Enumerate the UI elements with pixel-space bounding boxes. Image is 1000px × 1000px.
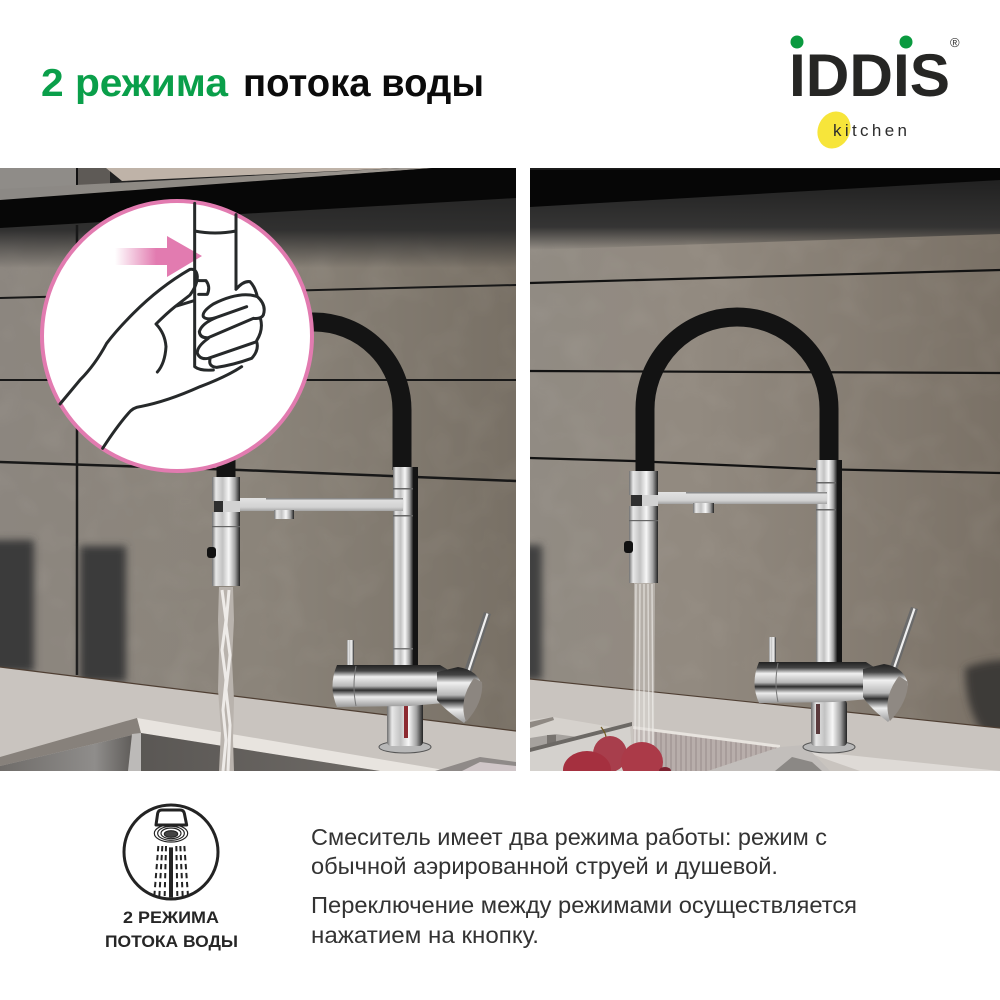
front corner sink bbox=[775, 747, 822, 771]
yellow spot bbox=[811, 106, 857, 154]
faucet arm bbox=[656, 492, 827, 513]
faucet right lever bbox=[890, 607, 918, 668]
spray head bbox=[624, 471, 658, 583]
countertop bbox=[530, 679, 1000, 771]
faucet left lever bbox=[769, 637, 776, 662]
title: потока воды bbox=[243, 62, 484, 105]
faucet arm bbox=[238, 498, 403, 519]
spray head bbox=[207, 477, 240, 586]
faucet body bbox=[754, 662, 908, 722]
description text: Переключение между режимами осуществляется bbox=[311, 892, 857, 918]
aerator housing bbox=[156, 810, 187, 825]
icon ring bbox=[124, 805, 218, 899]
countertop bbox=[0, 667, 516, 771]
aerator mesh bbox=[154, 825, 188, 842]
arrow: press direction bbox=[115, 236, 202, 277]
logo dots bbox=[790, 36, 912, 48]
counter front edge bbox=[812, 752, 998, 771]
wall bbox=[0, 230, 516, 730]
button bbox=[199, 281, 209, 294]
tile seams bbox=[0, 225, 516, 675]
fingers bbox=[197, 282, 264, 367]
callout circle bbox=[42, 201, 312, 471]
shelf bbox=[530, 168, 1000, 207]
shelf bbox=[0, 168, 516, 228]
photo: left, aerated stream bbox=[0, 168, 516, 771]
faucet body bbox=[332, 665, 482, 723]
sink rim bbox=[530, 725, 633, 771]
small basin bbox=[530, 717, 612, 750]
faucet riser bbox=[393, 467, 418, 672]
water stream, shower bbox=[633, 583, 655, 745]
central stream bbox=[165, 847, 177, 897]
second sink corner bbox=[435, 757, 516, 771]
title bbox=[41, 62, 484, 105]
icon caption: ПОТОКА ВОДЫ bbox=[105, 932, 238, 951]
registered mark: ® bbox=[950, 35, 960, 50]
left sink bbox=[0, 718, 450, 771]
tile seams bbox=[530, 270, 1000, 473]
icon caption: 2 РЕЖИМА bbox=[123, 908, 219, 927]
faucet riser bbox=[816, 460, 842, 670]
faucet left lever bbox=[347, 640, 354, 665]
logo wordmark: IDDIS bbox=[789, 42, 950, 109]
spray head outline bbox=[195, 203, 236, 370]
icon caption bbox=[105, 908, 238, 951]
photo: right, shower stream bbox=[522, 168, 1000, 789]
hose bbox=[645, 317, 829, 476]
description text: нажатием на кнопку. bbox=[311, 922, 539, 948]
hand and spray head drawing bbox=[60, 203, 264, 448]
title: 2 режима bbox=[41, 62, 228, 105]
faucet right lever bbox=[465, 612, 491, 672]
kitchen label: kitchen bbox=[833, 121, 907, 140]
upper cabinet and wood board bbox=[0, 168, 398, 189]
wrist bbox=[103, 367, 242, 448]
wall bbox=[530, 227, 1000, 726]
thumb and palm bbox=[60, 269, 197, 404]
callout: button press illustration bbox=[42, 201, 312, 471]
description text: обычной аэрированной струей и душевой. bbox=[311, 853, 778, 879]
logo: IDDIS kitchen bbox=[789, 35, 960, 154]
faucet base bbox=[379, 700, 431, 753]
water stream, aerated bbox=[218, 587, 234, 771]
hose bbox=[226, 322, 402, 482]
object shadows bbox=[522, 545, 1000, 735]
apples bbox=[563, 726, 671, 771]
shower droplets bbox=[154, 846, 188, 896]
description text bbox=[311, 824, 857, 948]
icon: two water-flow modes bbox=[124, 805, 218, 899]
faucet base bbox=[803, 700, 855, 753]
main basin brushed wall bbox=[633, 727, 780, 771]
description text: Смеситель имеет два режима работы: режим с bbox=[311, 824, 827, 850]
object shadows on wall bbox=[0, 540, 126, 682]
